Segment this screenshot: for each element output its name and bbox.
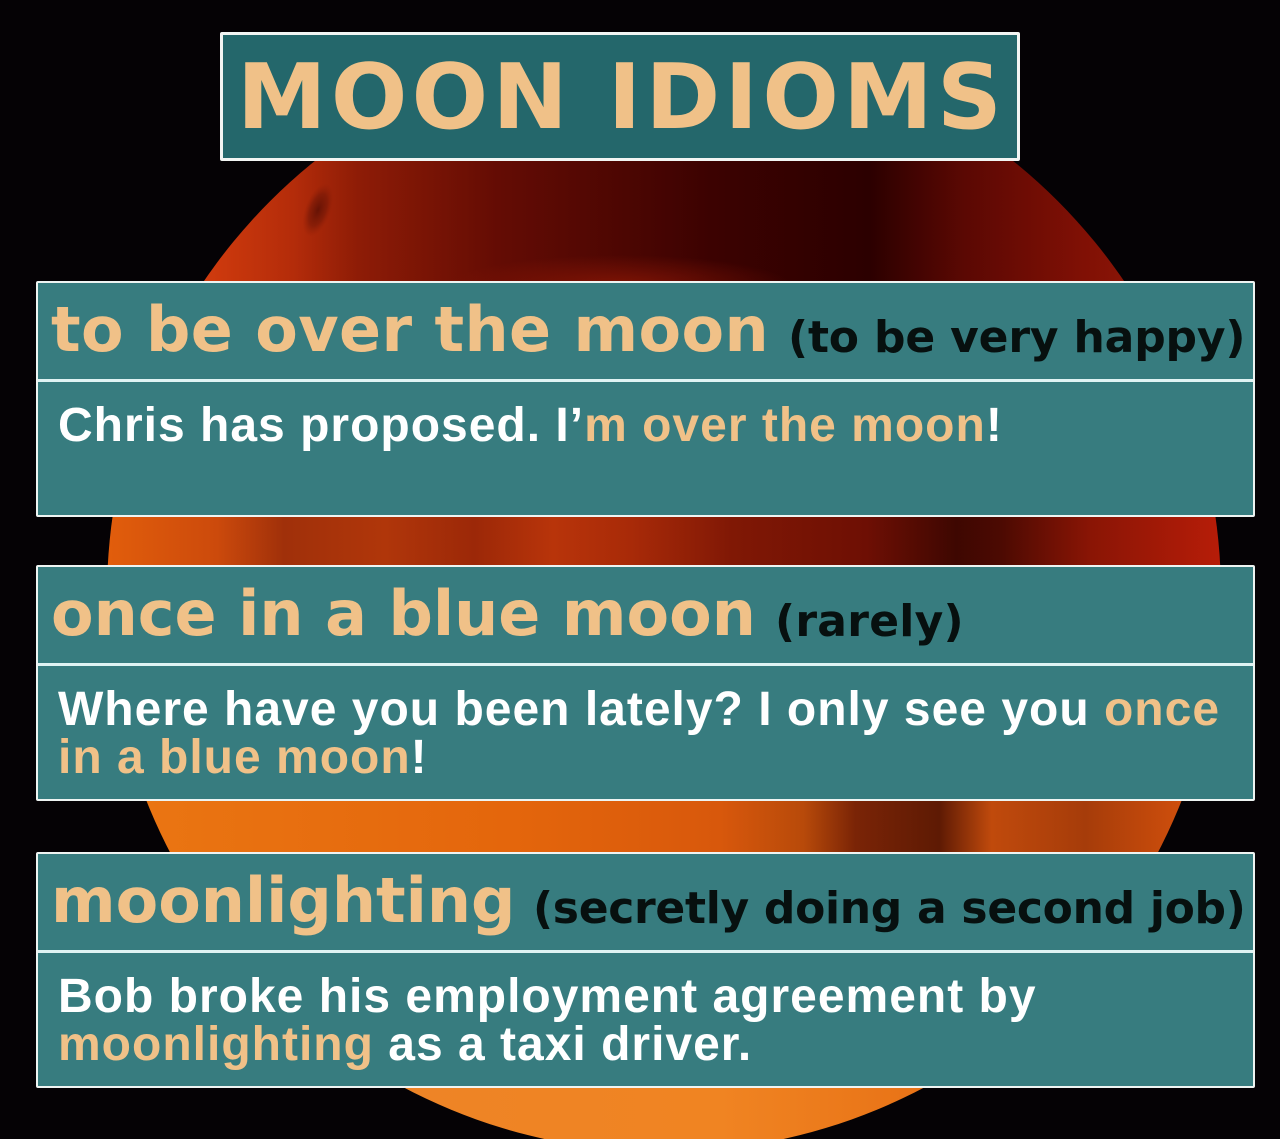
idiom heading: moonlighting xyxy=(51,864,515,937)
idiom meaning: (secretly doing a second job) xyxy=(533,883,1246,934)
title: MOON IDIOMS xyxy=(237,45,1006,150)
example sentence: Bob broke his employment agreement by xyxy=(58,970,1037,1023)
idiom meaning: (rarely) xyxy=(775,596,964,647)
example sentence: Where have you been lately? I only see you once xyxy=(58,683,1220,736)
panel: to be over the moon xyxy=(36,281,1255,517)
panel: once in a blue moon xyxy=(36,565,1255,801)
idiom heading: once in a blue moon xyxy=(51,577,756,650)
example sentence: in a blue moon! xyxy=(58,731,428,784)
panel: moonlighting xyxy=(36,852,1255,1088)
idiom meaning: (to be very happy) xyxy=(788,312,1245,363)
example sentence: moonlighting as a taxi driver. xyxy=(58,1018,752,1071)
example sentence xyxy=(58,970,1037,1071)
idiom heading: to be over the moon xyxy=(51,293,769,366)
example sentence: Chris has proposed. I’m over the moon! xyxy=(58,399,1003,452)
example sentence xyxy=(58,683,1220,784)
background: red moon xyxy=(108,161,1220,1139)
